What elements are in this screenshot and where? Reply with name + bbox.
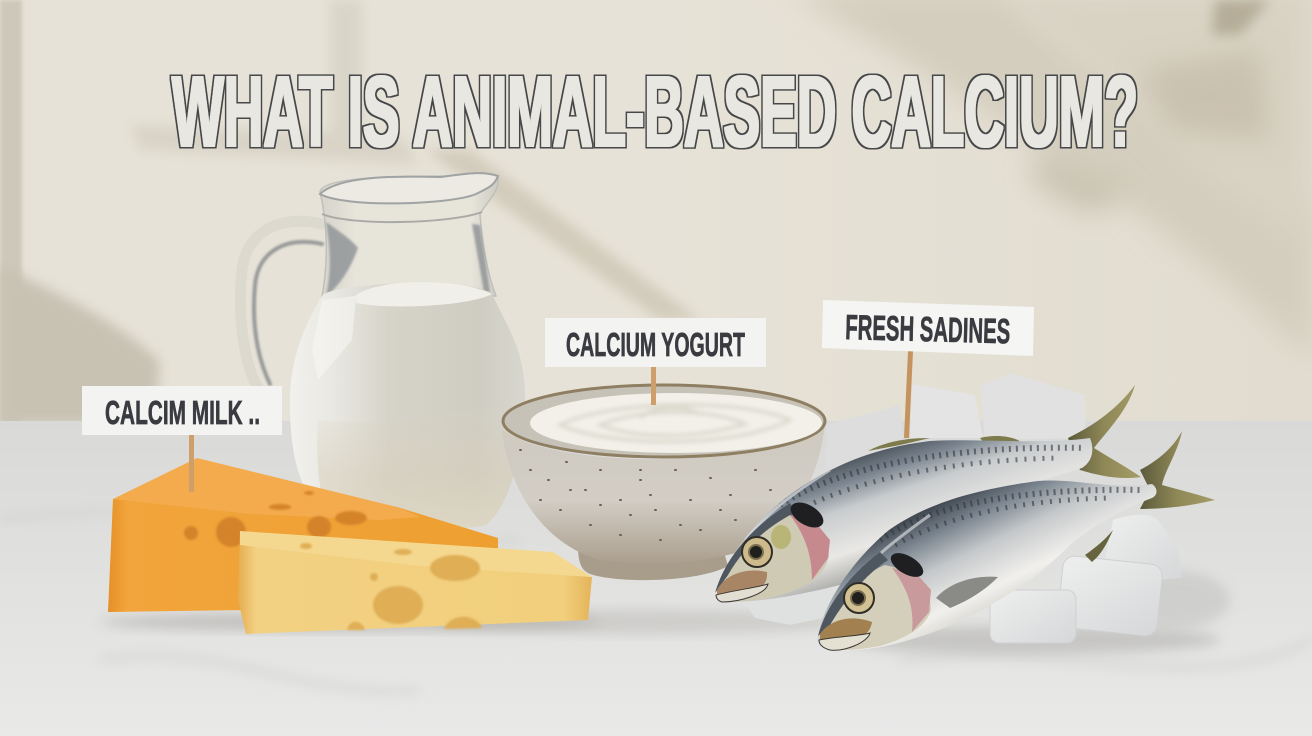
front fish lower fin — [1085, 530, 1113, 562]
glass neck — [320, 176, 498, 296]
yellow wedge side — [238, 531, 592, 634]
front fish pectoral fin — [936, 577, 998, 608]
back fish tail — [1068, 385, 1141, 478]
label: fresh sadines — [822, 300, 1034, 438]
back fish body — [715, 438, 1092, 602]
back fish scales — [745, 448, 1085, 540]
back fish snout — [717, 571, 767, 596]
front fish eye — [844, 583, 874, 613]
front fish head — [820, 565, 931, 650]
sign stick — [904, 351, 913, 438]
milk highlight — [312, 296, 356, 380]
back fish eye — [742, 537, 772, 567]
sign card — [82, 386, 282, 435]
bowl speckles — [520, 450, 771, 540]
jug handle — [241, 221, 322, 388]
milk surface — [356, 282, 492, 306]
bowl of yogurt — [502, 385, 825, 580]
glass collar — [322, 212, 482, 222]
bowl body — [502, 423, 825, 563]
bowl rim — [503, 385, 825, 457]
front fish scales — [879, 486, 1140, 554]
cheese wedges — [108, 458, 592, 634]
back fish dorsal fin — [868, 436, 1022, 451]
label: calcium yogurt — [545, 318, 766, 405]
wall background — [0, 0, 1312, 425]
orange wedge side — [108, 499, 498, 612]
yellow wedge holes — [300, 543, 482, 630]
sign card — [822, 300, 1034, 356]
back fish gill — [790, 515, 830, 580]
sign card — [545, 318, 766, 367]
front fish head top — [818, 552, 888, 636]
back fish shoulder patch — [786, 497, 828, 533]
front fish shoulder patch — [887, 548, 927, 582]
front fish gill — [892, 568, 931, 632]
orange wedge top — [113, 458, 420, 520]
milk lower shading — [317, 395, 524, 528]
back fish head — [717, 515, 829, 601]
sign text: FRESH SADINES — [845, 308, 1011, 351]
sign text: CALCIM MILK .. — [105, 394, 260, 431]
back fish head top — [715, 503, 796, 593]
milk jug — [241, 173, 525, 528]
jug handle shading — [254, 242, 322, 384]
sign stick — [189, 435, 194, 492]
marble table surface — [0, 421, 1312, 736]
front fish tail — [1140, 431, 1215, 509]
yogurt — [530, 393, 822, 453]
label: calcim milk — [82, 386, 282, 492]
front fish body — [818, 481, 1156, 651]
sign stick — [651, 367, 656, 405]
sign text: CALCIUM YOGURT — [566, 326, 745, 363]
sardine front — [818, 431, 1215, 651]
front fish jaw — [819, 633, 870, 650]
milk — [290, 283, 525, 528]
yellow wedge top — [240, 531, 592, 577]
back fish jaw — [716, 584, 768, 602]
yellow wedge — [238, 531, 592, 634]
yogurt swirl — [560, 405, 790, 442]
orange wedge holes — [184, 491, 367, 547]
ice cubes — [746, 373, 1182, 643]
sardine back — [715, 385, 1141, 602]
back fish cheek patch — [771, 525, 791, 549]
bowl foot — [578, 545, 728, 580]
front fish snout — [820, 618, 872, 642]
orange wedge — [108, 458, 498, 612]
neck reflections — [326, 222, 490, 296]
glass rim — [320, 173, 498, 203]
